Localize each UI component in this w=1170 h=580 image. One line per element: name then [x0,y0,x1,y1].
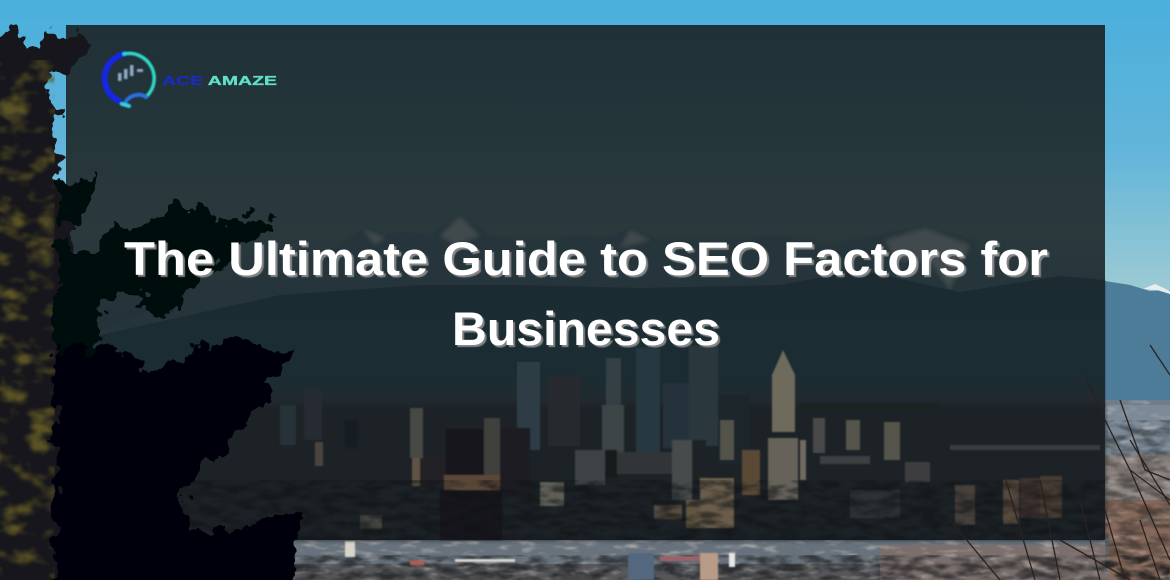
background photo: distant mountains at right [1105,281,1170,420]
bare tree branches at bottom right [950,345,1170,580]
tree: left trunk outside panel [0,28,92,580]
city strip details [345,541,735,580]
title [124,232,1048,355]
tree: olive foliage [0,60,55,580]
foreground conifer tree [0,28,305,580]
title line 2: Businesses [452,302,720,355]
background photo: sky [0,0,1170,300]
logo wordmark: ACE AMAZE [162,74,277,88]
title line 1: The Ultimate Guide to SEO Factors for [124,232,1048,285]
logo [105,53,277,106]
logo icon: ring [105,53,154,106]
mountain range [100,214,1105,408]
logo icon: bars [118,65,143,81]
background photo: city strip outside panel [0,400,1170,580]
front buildings [315,403,1100,540]
tree: upper branch [55,175,278,350]
skyline scene inside panel [66,214,1105,540]
city texture [66,480,1105,540]
dark translucent panel [66,25,1105,540]
tree: middle and lower mass [55,345,305,580]
back towers [280,346,795,465]
city haze base [66,405,1105,540]
